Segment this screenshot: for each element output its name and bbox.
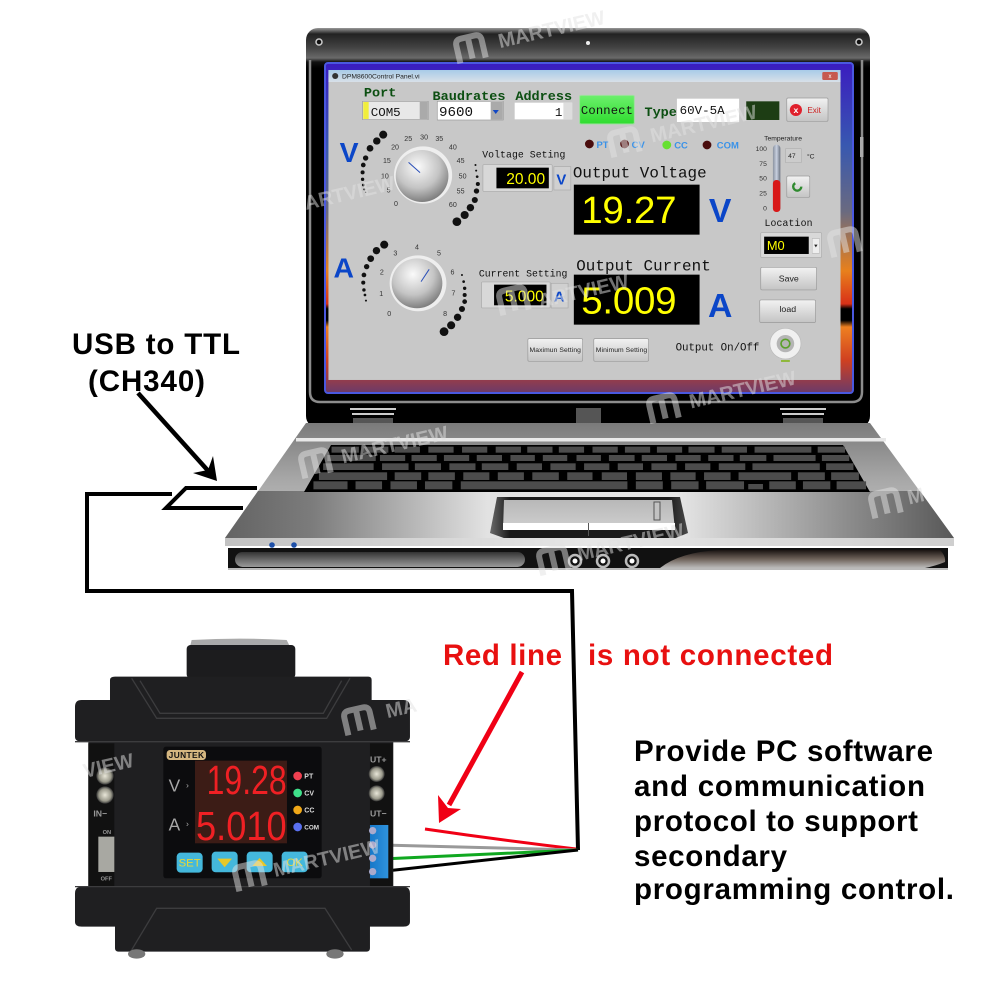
status LEDs: CC	[674, 140, 688, 151]
status LEDs	[585, 139, 739, 151]
output current display: Output Current	[576, 257, 711, 275]
address field: Address	[515, 90, 572, 105]
type field: Type	[644, 106, 677, 121]
red arrow	[438, 672, 522, 823]
unit labels: V	[169, 775, 181, 795]
body bevels	[75, 678, 410, 950]
output current display: A	[708, 288, 732, 325]
indicator lights: PT	[304, 773, 314, 780]
watermark	[648, 366, 799, 423]
port selector	[363, 87, 428, 120]
indicator lights: CC	[304, 807, 314, 814]
voltage knob: 15	[383, 158, 391, 165]
laptop base	[225, 423, 954, 570]
watermarks	[81, 6, 927, 891]
temperature gauge: Temperature	[764, 135, 802, 142]
temperature gauge	[756, 135, 815, 212]
indicator lights: CV	[304, 790, 314, 797]
minimum setting button: Minimum Setting	[596, 347, 647, 354]
status LEDs: PT	[596, 139, 609, 150]
voltage knob	[340, 131, 480, 226]
watermark: ARTVIEW	[536, 271, 631, 313]
current knob: 8	[443, 311, 447, 318]
not connected label: is not connected	[588, 639, 833, 672]
watermark: MARTVIEW	[496, 7, 607, 53]
laptop lid	[306, 28, 870, 428]
baudrate selector: Baudrates	[433, 90, 505, 105]
watermark: M	[905, 484, 926, 509]
USB cable	[87, 488, 578, 850]
current knob: 3	[393, 251, 397, 258]
location selector	[761, 218, 822, 257]
location selector: Location	[764, 218, 812, 229]
front panel	[163, 747, 322, 878]
description text: Provide PC software	[634, 735, 933, 768]
current knob: 4	[415, 244, 419, 251]
watermark	[234, 835, 383, 891]
description text: and communication	[634, 770, 925, 803]
watermark: VIEW	[81, 750, 136, 783]
baudrate selector	[433, 90, 505, 121]
address field	[515, 90, 572, 120]
watermark: MARTVIEW	[339, 422, 450, 468]
current setting control	[479, 269, 568, 308]
watermark: MARTVIEW	[648, 101, 759, 147]
control buttons: SET	[179, 858, 201, 870]
watermark	[300, 421, 451, 478]
unit labels: ›	[186, 819, 189, 829]
load button: load	[779, 304, 796, 314]
connect button: Connect	[581, 104, 633, 118]
status LEDs: COM	[717, 140, 739, 151]
right terminal: UT+	[370, 755, 387, 765]
watermark	[829, 228, 860, 257]
LED display: 5.010	[196, 803, 287, 849]
device body	[75, 677, 410, 952]
save button	[761, 267, 817, 290]
LED display: 19.28	[207, 757, 287, 803]
description text	[634, 735, 954, 906]
control panel window	[328, 70, 841, 380]
voltage setting control: 20.00	[506, 171, 545, 188]
exit button: Exit	[807, 106, 822, 115]
right terminal	[369, 743, 393, 886]
touchpad	[490, 497, 688, 541]
control buttons	[177, 852, 308, 873]
palm rest	[225, 491, 954, 538]
watermark	[455, 6, 608, 63]
port selector: Port	[364, 87, 396, 102]
port selector: COM5	[371, 106, 401, 120]
output on/off toggle	[676, 328, 801, 362]
unit labels	[169, 775, 189, 835]
exit button	[787, 98, 828, 121]
watermark	[498, 286, 529, 315]
USB to TTL label: (CH340)	[88, 365, 205, 398]
voltage knob: 55	[457, 189, 465, 196]
control buttons: OK	[286, 857, 303, 869]
left terminal: IN−	[93, 809, 107, 819]
window title bar: x	[829, 74, 832, 80]
temperature gauge: °C	[807, 153, 815, 161]
voltage setting control: V	[556, 173, 566, 189]
USB to TTL label: USB to TTL	[72, 328, 240, 361]
brand badge: JUNTEK	[169, 750, 204, 760]
load button	[760, 300, 816, 323]
watermark: MARTVIEW	[575, 520, 686, 566]
voltage knob: 20	[391, 144, 399, 151]
voltage knob: 0	[394, 201, 398, 208]
voltage knob: 60	[449, 202, 457, 209]
current knob: A	[334, 251, 354, 283]
bottom feet	[128, 949, 344, 959]
description text: secondary	[634, 840, 788, 873]
connect button	[580, 95, 634, 124]
current knob: 1	[379, 291, 383, 298]
temperature gauge: 0	[763, 205, 767, 212]
current knob	[334, 241, 467, 336]
voltage setting control: Voltage Seting	[482, 150, 565, 161]
output voltage display	[573, 165, 732, 235]
voltage knob: 50	[459, 174, 467, 181]
baudrate selector: 9600	[439, 105, 473, 121]
watermark	[343, 695, 420, 735]
unit labels: ›	[186, 780, 189, 790]
exit button: x	[793, 105, 798, 115]
indicator lights	[293, 772, 319, 831]
output current display: 5.009	[581, 280, 677, 322]
watermark: MARTVIEW	[271, 836, 382, 882]
status LEDs: CV	[632, 139, 646, 150]
watermark	[870, 483, 927, 518]
left terminal: OFF	[101, 877, 113, 883]
watermark	[538, 519, 687, 575]
voltage knob: 30	[420, 134, 428, 141]
minimum setting button	[594, 339, 649, 361]
maximum setting button: Maximun Setting	[530, 347, 581, 354]
description text: protocol to support	[634, 805, 918, 838]
unit labels: A	[169, 815, 181, 835]
current knob: 7	[452, 290, 456, 297]
save button: Save	[779, 273, 799, 283]
current knob: 5	[437, 251, 441, 258]
maximum setting button	[528, 339, 583, 361]
arrow to USB adapter	[138, 393, 217, 481]
right terminal: UT−	[370, 809, 387, 819]
output voltage display: Output Voltage	[573, 165, 707, 183]
type field	[644, 99, 779, 122]
deck	[225, 423, 954, 538]
device wires	[382, 829, 578, 871]
voltage knob: V	[340, 136, 359, 168]
current knob: 6	[451, 269, 455, 276]
watermark: MA	[384, 695, 419, 723]
temperature gauge: 47	[788, 153, 796, 160]
watermark: ARTVIEW	[302, 173, 397, 215]
red line label: Red line	[443, 639, 562, 672]
location selector: M0	[767, 238, 785, 253]
temperature gauge: 100	[756, 146, 767, 153]
front edge	[225, 538, 954, 570]
output on/off toggle: Output On/Off	[676, 343, 759, 355]
temperature gauge: 75	[759, 161, 767, 168]
current setting control: 5.000	[505, 288, 544, 305]
window title bar: DPM8600Control Panel.vi	[342, 73, 420, 80]
power supply device	[75, 639, 410, 959]
silver hinge line	[296, 438, 886, 442]
watermark: MARTVIEW	[687, 367, 798, 413]
address field: 1	[555, 106, 562, 120]
current setting control: Current Setting	[479, 269, 567, 280]
output voltage display: 19.27	[581, 189, 677, 232]
output voltage display: V	[709, 193, 732, 230]
current knob: 2	[380, 269, 384, 276]
left terminal: ON	[103, 830, 111, 836]
laptop	[225, 28, 954, 570]
voltage knob: 5	[387, 187, 391, 194]
left terminal	[88, 743, 114, 886]
window title bar	[328, 70, 841, 82]
connector	[187, 639, 295, 678]
current knob: 0	[387, 311, 391, 318]
temperature gauge: 25	[759, 190, 767, 197]
voltage knob: 40	[449, 144, 457, 151]
voltage knob: 45	[457, 158, 465, 165]
temperature gauge: 50	[759, 175, 767, 182]
description text: programming control.	[634, 873, 954, 906]
indicator lights: COM	[304, 824, 319, 831]
voltage knob: 25	[404, 136, 412, 143]
current setting control: A	[554, 289, 565, 305]
screen wallpaper	[325, 63, 853, 393]
output current display	[574, 257, 732, 325]
voltage knob: 35	[435, 136, 443, 143]
keyboard	[304, 445, 870, 492]
voltage knob: 10	[381, 174, 389, 181]
type field: 60V-5A	[680, 104, 725, 118]
watermark	[609, 100, 760, 157]
LED display	[195, 757, 287, 849]
USB to TTL label	[72, 328, 240, 398]
voltage setting control	[482, 150, 571, 191]
